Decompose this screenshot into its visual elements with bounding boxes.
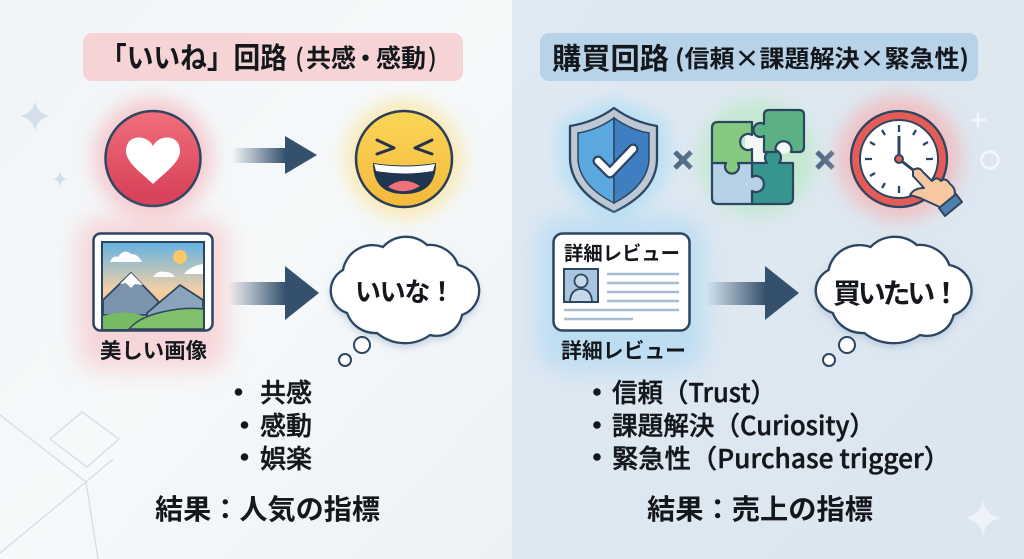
label: detailed review: 詳細レビュー xyxy=(561,335,686,365)
arrow: review to thought xyxy=(706,266,799,320)
list: left bullets: 感動 xyxy=(260,406,312,443)
icon: ring decoration xyxy=(982,152,998,168)
heading: left title xyxy=(83,33,463,81)
icon: laughing face xyxy=(345,100,463,218)
list: left bullets xyxy=(235,373,312,476)
heading: left title: 「いいね」回路 xyxy=(100,35,287,77)
card: detailed review: 詳細レビュー xyxy=(564,237,680,266)
heading: right title xyxy=(540,33,978,81)
icon: multiply sign 1 xyxy=(675,152,691,168)
icon: plus decoration xyxy=(971,113,986,127)
icon: landscape image xyxy=(78,218,228,370)
heading: left title: ) xyxy=(428,39,437,75)
heading: left title: 共感 xyxy=(306,39,356,75)
heading: left title: ( xyxy=(295,39,304,75)
icon: right sparkle xyxy=(965,500,1001,536)
thought bubble: right: 買いたい！ xyxy=(833,272,960,312)
result: left: 結果：人気の指標 xyxy=(155,488,380,528)
icon: left sparkle small xyxy=(53,171,67,187)
icon: heart badge xyxy=(93,98,213,218)
icon: shield xyxy=(560,100,667,222)
list: right bullets: 信頼（Trust） xyxy=(612,373,776,410)
list: right bullets: 課題解決（Curiosity） xyxy=(612,406,875,443)
arrow: heart to laughing face xyxy=(232,136,317,174)
panel: left background xyxy=(0,0,512,559)
thought bubble: left xyxy=(331,237,479,366)
card: detailed review xyxy=(538,218,704,370)
result: right: 結果：売上の指標 xyxy=(647,488,873,528)
thought bubble: right xyxy=(816,237,972,366)
list: right bullets: 緊急性（Purchase trigger） xyxy=(612,439,950,476)
list: left bullets: 共感 xyxy=(260,373,312,410)
thought bubble: left: いいな！ xyxy=(355,272,455,309)
icon: left sparkle large xyxy=(20,101,50,131)
panel: right background xyxy=(512,0,1024,559)
icon: clock with pointing hand xyxy=(837,96,962,220)
icon: multiply sign 2 xyxy=(817,152,833,168)
heading: left title: 感動 xyxy=(376,39,426,75)
list: right bullets xyxy=(593,373,950,476)
heading: left title: ・ xyxy=(353,39,378,75)
icon: puzzle pieces xyxy=(699,100,815,216)
list: left bullets: 娯楽 xyxy=(260,439,312,476)
heading: right title: 購買回路 xyxy=(552,36,669,78)
heading: right title: (信頼×課題解決×緊急性) xyxy=(675,39,969,74)
arrow: image to thought xyxy=(228,266,319,320)
label: beautiful image: 美しい画像 xyxy=(100,335,207,365)
